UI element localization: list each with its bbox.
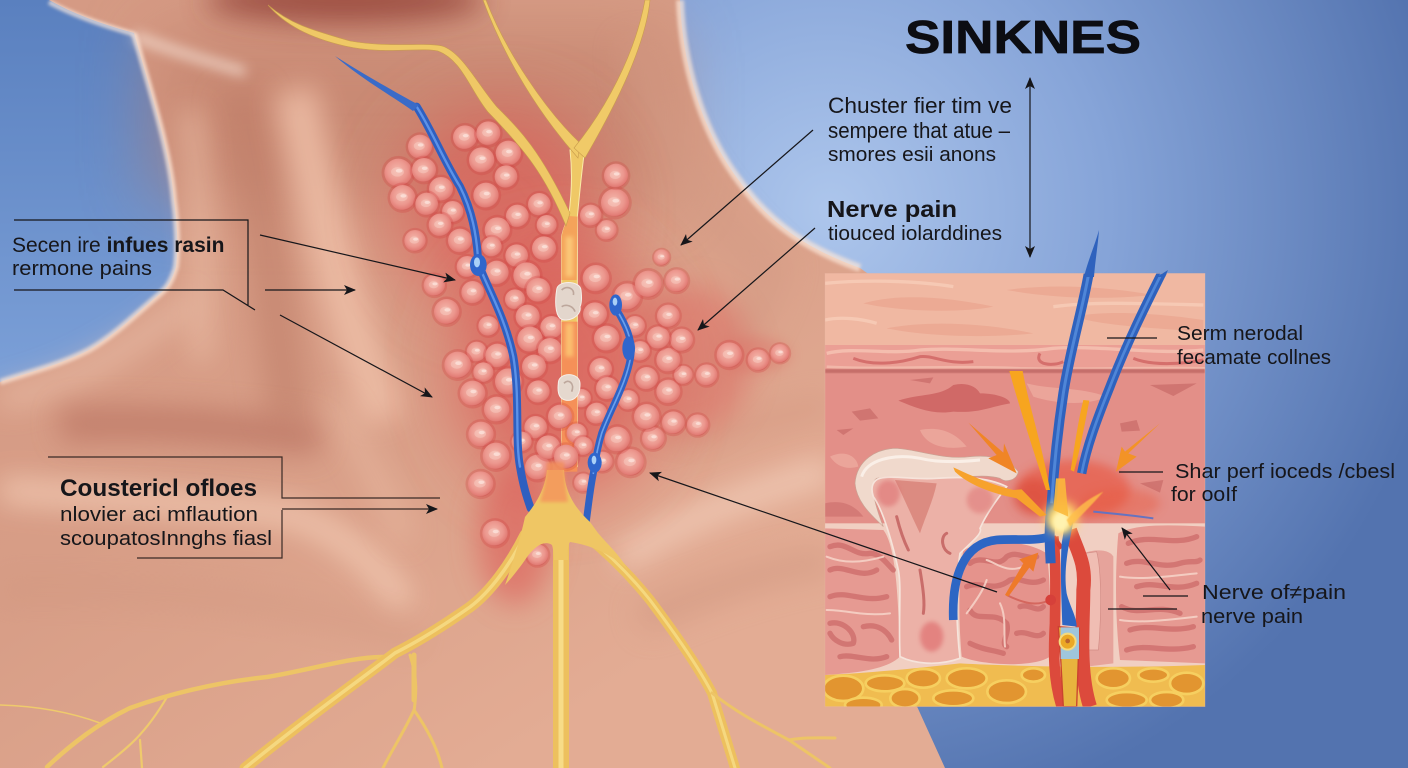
text block: nerve pain: Nerve pain: [827, 196, 957, 222]
skin shading: [0, 0, 860, 640]
text block: sharp: Shar perf ioceds /cbesl: [1175, 461, 1395, 483]
text block: nerve of pain: Nerve of≠pain: [1202, 582, 1346, 604]
arrows from top right callouts: [681, 130, 815, 330]
red vessels: [1007, 530, 1090, 707]
lobule folds: [830, 537, 1200, 659]
central sheath and blue vessel: [1058, 522, 1079, 707]
arrow from section to blisters: [650, 473, 997, 592]
text block: left lower callout: [60, 475, 272, 550]
right side leader lines and arrow: [1107, 338, 1188, 609]
dermis layer: [825, 369, 1205, 529]
wavy layer: [825, 345, 1205, 370]
text block: nerve of pain: nerve pain: [1201, 606, 1303, 628]
hair follicle structure: [855, 448, 1018, 663]
neck and shoulder skin: [0, 0, 945, 768]
nerve ganglia nodes: [556, 282, 582, 400]
text block: nerve of pain: [1201, 582, 1346, 628]
title: SINKNES: [905, 11, 1141, 63]
glowing pain burst: [1045, 478, 1103, 535]
central yellow nerve trunk: [562, 150, 585, 472]
left lower callout leader lines and arrow: [48, 457, 440, 558]
nerve junction blob: [505, 470, 628, 585]
blue nerve right: [586, 294, 635, 523]
blue nerve left: [417, 107, 531, 508]
text block: left lower callout: nlovier aci mflaution: [60, 504, 258, 526]
text block: top right callout: [828, 93, 1012, 166]
blue nerve extensions above panel: [1084, 230, 1168, 277]
panel edge: [825, 273, 1205, 707]
inflammation glow: [1013, 460, 1160, 520]
text block: left lower callout: scoupatosInnghs fiasl: [60, 528, 272, 550]
text block: top right callout: Chuster fier tim ve: [828, 93, 1012, 118]
text block: left upper callout: [12, 234, 224, 280]
panel: skin cross-section: [823, 270, 1205, 712]
lower yellow nerve branches: [0, 535, 835, 768]
text block: sharp: [1171, 461, 1395, 506]
left upper callout leader lines and arrows: [14, 220, 455, 397]
text block: serm nerodal: fecamate collnes: [1177, 347, 1331, 369]
tapered blue nerve start: [335, 56, 419, 111]
text block: sharp: for ooIf: [1171, 484, 1237, 506]
epidermis layer: [825, 273, 1205, 348]
text block: serm nerodal: [1177, 323, 1331, 369]
inflammation redness: [395, 105, 791, 605]
blisters cluster and neck nerves: [382, 107, 791, 568]
text block: left lower callout: Coustericl ofloes: [60, 475, 257, 502]
text block: serm nerodal: Serm nerodal: [1177, 323, 1303, 345]
text block: top right callout: sempere that atue –: [828, 118, 1011, 143]
upper yellow nerves: [268, 0, 650, 226]
text block: left upper callout: rermone pains: [12, 258, 152, 280]
text block: nerve pain: [827, 196, 1002, 245]
nerve junction glow: [540, 462, 568, 502]
text block: top right callout: smores esii anons: [828, 144, 996, 166]
lower blisters over trunk: [534, 402, 595, 471]
blister cluster: [382, 119, 791, 568]
blue vessels: [953, 270, 1163, 620]
lower tissue lobules: [825, 523, 1205, 677]
vertical double arrow: [1029, 78, 1031, 257]
light fold strokes: [827, 557, 1197, 647]
orange pain arrows: [953, 371, 1160, 597]
text block: nerve pain: tiouced iolarddines: [828, 223, 1002, 245]
text block: left upper callout: Secen ire infues rasin: [12, 234, 224, 257]
yellow fat layer: [825, 663, 1205, 707]
